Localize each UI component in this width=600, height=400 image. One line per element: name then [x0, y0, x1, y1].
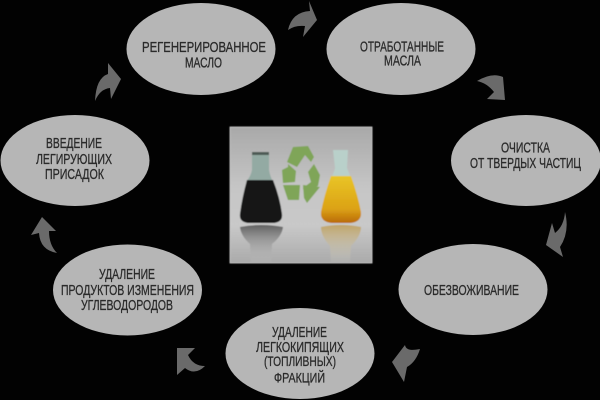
image panel	[230, 127, 372, 263]
node: solids removal: ОЧИСТКА	[501, 140, 550, 156]
arrow: regenerated to used	[288, 1, 317, 37]
node: light fractions removal: ЛЕГКОКИПЯЩИХ	[256, 339, 344, 356]
node: light fractions removal: (ТОПЛИВНЫХ)	[264, 353, 336, 369]
arrow: used to solids removal	[477, 75, 505, 100]
dark flask	[240, 152, 282, 223]
arrow: products to additives	[31, 217, 57, 253]
yellow flask	[321, 150, 361, 223]
center image: flasks and recycle symbol	[230, 127, 372, 263]
recycle symbol	[282, 146, 320, 203]
node: light fractions removal: ФРАКЦИЙ	[274, 368, 325, 386]
node: additives introduction	[0, 115, 150, 206]
node: dehydration	[398, 244, 548, 335]
node: light fractions removal	[226, 308, 374, 399]
node: hydrocarbon products removal: ПРОДУКТОВ ИЗМЕНЕНИЯ	[61, 282, 194, 299]
node: used oils: МАСЛА	[384, 52, 421, 70]
node: hydrocarbon products removal: УГЛЕВОДОРОДОВ	[81, 297, 173, 314]
arrow: additives to regenerated	[95, 63, 121, 101]
node: light fractions removal: УДАЛЕНИЕ	[272, 324, 327, 341]
node: hydrocarbon products removal: УДАЛЕНИЕ	[99, 266, 155, 283]
node: solids removal	[451, 115, 600, 206]
node: used oils	[326, 3, 476, 95]
node: hydrocarbon products removal	[53, 244, 202, 336]
dark flask reflection	[240, 225, 283, 262]
node: dehydration: ОБЕЗВОЖИВАНИЕ	[424, 282, 519, 299]
arrow: fractions to products	[177, 348, 205, 375]
node: regenerated oil	[126, 3, 276, 95]
node: regenerated oil: МАСЛО	[185, 54, 222, 72]
arrow: solids to dehydration	[546, 212, 567, 257]
node: regenerated oil: РЕГЕНЕРИРОВАННОЕ	[142, 39, 266, 56]
node: additives introduction: ПРИСАДОК	[45, 166, 104, 183]
yellow flask reflection	[321, 225, 361, 262]
arrow: dehydration to fractions	[392, 345, 420, 382]
node: additives introduction: ЛЕГИРУЮЩИХ	[36, 151, 112, 168]
node: used oils: ОТРАБОТАННЫЕ	[360, 38, 444, 56]
node: additives introduction: ВВЕДЕНИЕ	[46, 135, 102, 152]
